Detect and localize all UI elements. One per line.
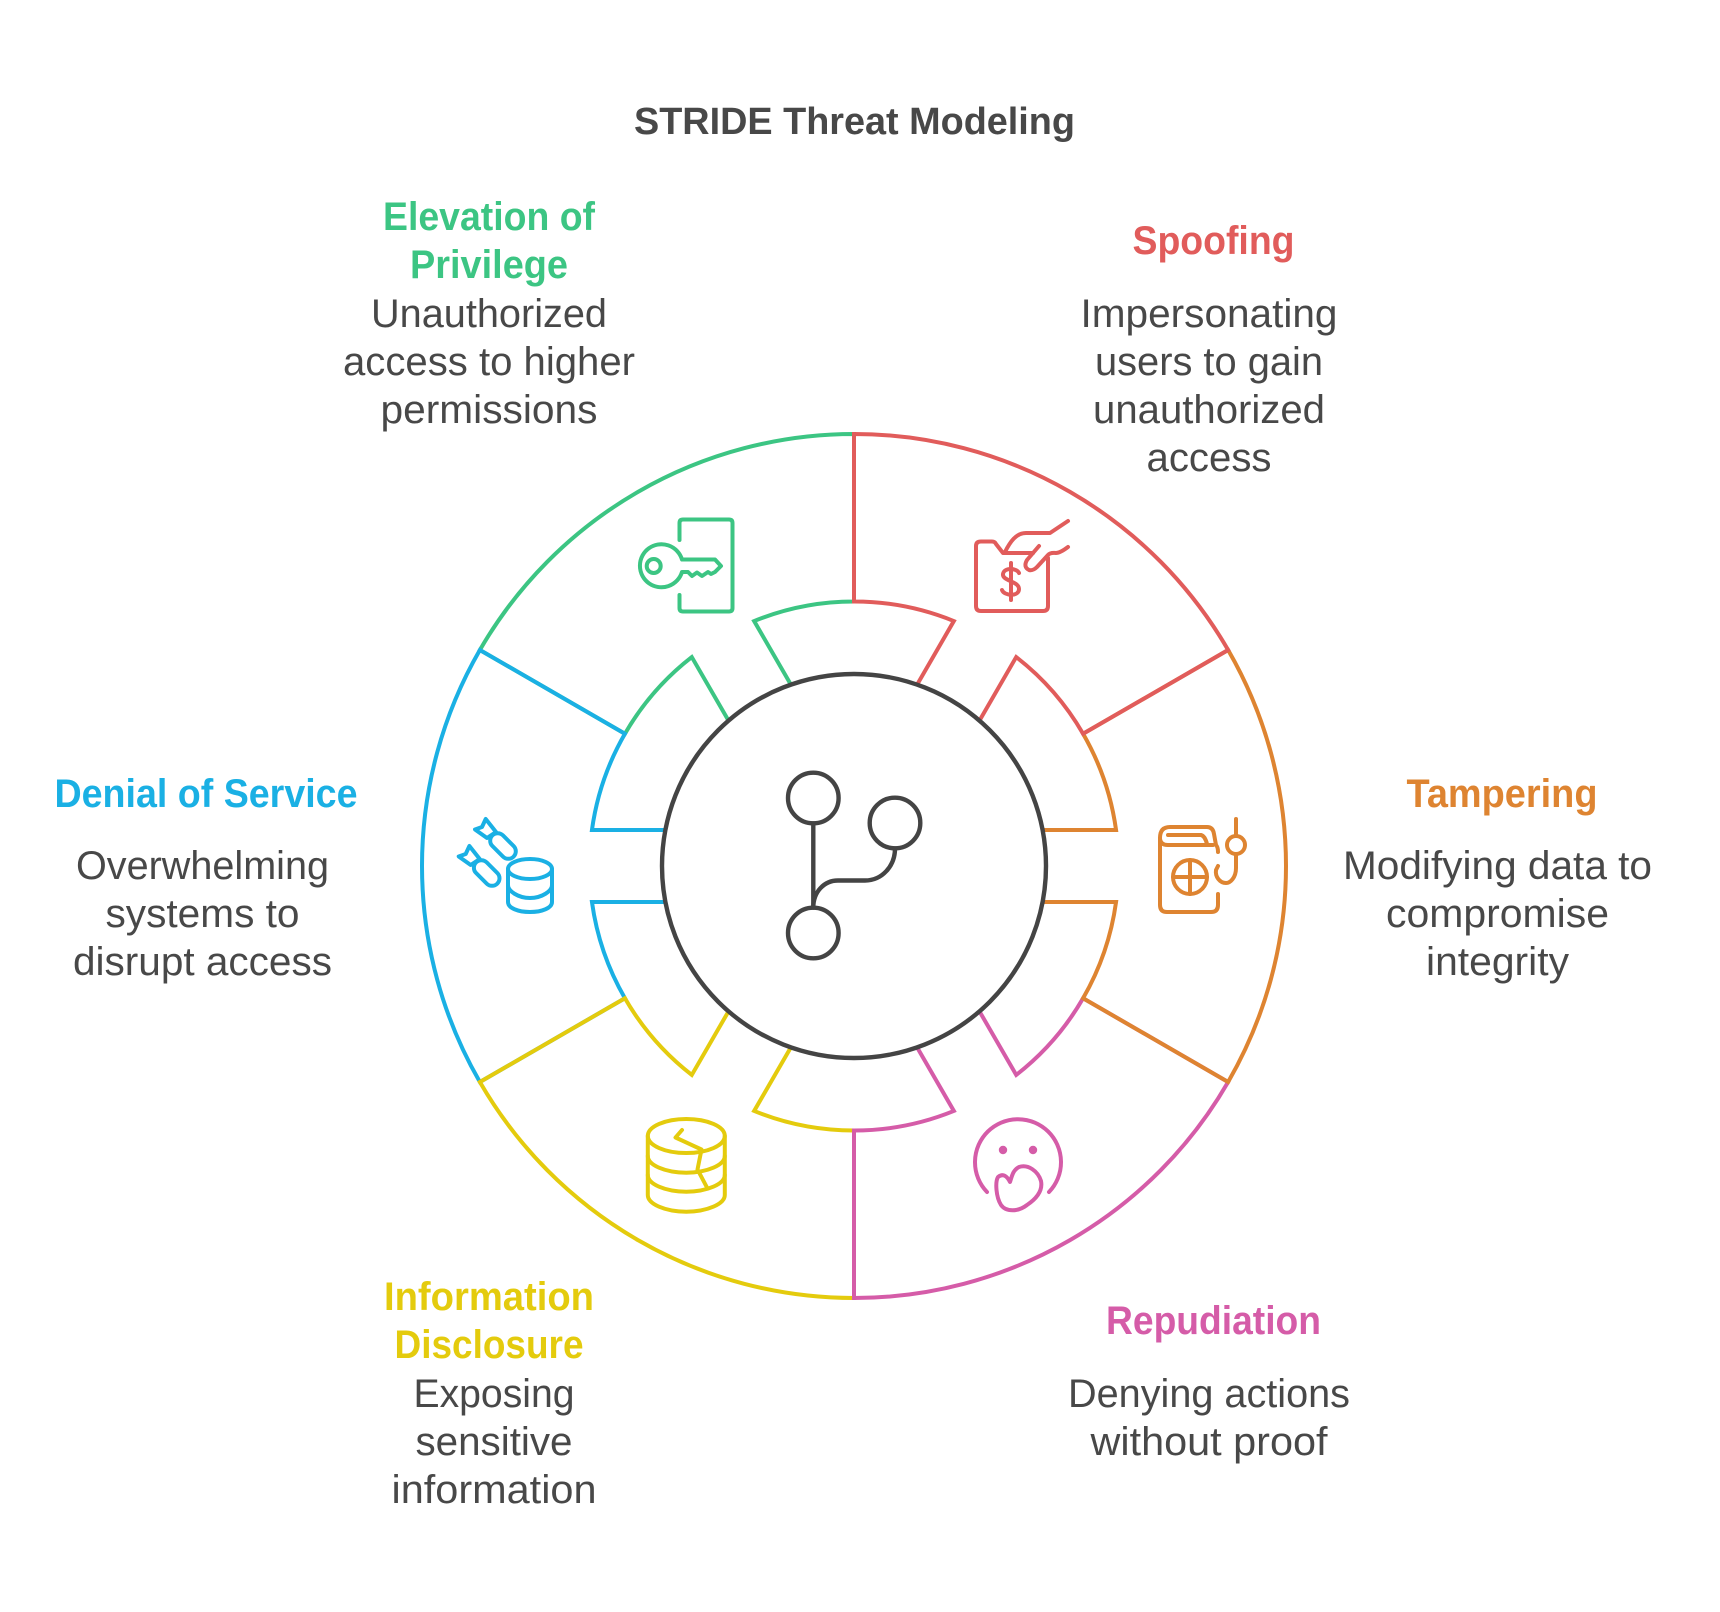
- heading: elevation of privilege: Elevation of: [383, 195, 596, 239]
- heading: elevation of privilege: Privilege: [410, 243, 568, 287]
- description: denial of service: systems to: [106, 892, 300, 936]
- sector outline: elevation of privilege: [480, 326, 927, 800]
- sector outline: information disclosure: [480, 998, 854, 1298]
- description: tampering: integrity: [1426, 940, 1569, 984]
- heading: information disclosure: Information: [384, 1275, 594, 1319]
- heading: information disclosure: Disclosure: [394, 1323, 584, 1367]
- panel: tampering: [969, 650, 1652, 1124]
- description: elevation of privilege: [343, 292, 635, 432]
- description: repudiation: Denying actions: [1068, 1372, 1350, 1416]
- heading: information disclosure: [384, 1275, 594, 1367]
- heading: denial of service: Denial of Service: [54, 772, 358, 816]
- description: information disclosure: information: [392, 1468, 596, 1512]
- description: spoofing: unauthorized: [1093, 388, 1325, 432]
- sector outline: repudiation: [781, 932, 1228, 1406]
- heading: elevation of privilege: [383, 195, 596, 287]
- description: denial of service: Overwhelming: [76, 844, 329, 888]
- icon: cracked database: [648, 1119, 725, 1212]
- panel: spoofing: [854, 219, 1338, 734]
- description: information disclosure: sensitive: [416, 1420, 572, 1464]
- center circle: [662, 674, 1046, 1058]
- panel: denial of service: [54, 608, 739, 1082]
- description: spoofing: [1080, 292, 1338, 480]
- sector outline: tampering: [969, 650, 1415, 1124]
- description: repudiation: [1068, 1372, 1350, 1464]
- description: tampering: compromise: [1386, 892, 1609, 936]
- heading: tampering: Tampering: [1406, 772, 1598, 816]
- icon: branching nodes: [788, 773, 920, 958]
- description: spoofing: access: [1146, 436, 1272, 480]
- panel: repudiation: [781, 932, 1350, 1464]
- sector outline: denial of service: [293, 608, 739, 1082]
- description: tampering: [1343, 844, 1652, 984]
- description: elevation of privilege: permissions: [380, 388, 598, 432]
- heading: repudiation: Repudiation: [1106, 1299, 1321, 1343]
- description: tampering: Modifying data to: [1343, 844, 1652, 888]
- icon: hand taking money from folder: [976, 521, 1068, 611]
- description: denial of service: [73, 844, 332, 984]
- heading: spoofing: Spoofing: [1132, 219, 1294, 263]
- icon: book and hook: [1160, 819, 1245, 912]
- description: elevation of privilege: access to higher: [343, 340, 635, 384]
- icon: shocked face: [975, 1119, 1061, 1210]
- description: repudiation: without proof: [1089, 1420, 1328, 1464]
- description: spoofing: users to gain: [1095, 340, 1323, 384]
- panel: information disclosure: [384, 998, 854, 1512]
- sector outline: spoofing: [854, 434, 1228, 734]
- icon: key and door: [640, 520, 732, 612]
- description: information disclosure: [392, 1372, 596, 1512]
- panel: elevation of privilege: [343, 195, 927, 800]
- icon: bombs and database: [459, 819, 552, 912]
- description: elevation of privilege: Unauthorized: [371, 292, 607, 336]
- title: STRIDE Threat Modeling: [634, 101, 1075, 143]
- description: denial of service: disrupt access: [73, 940, 332, 984]
- description: information disclosure: Exposing: [414, 1372, 574, 1416]
- description: spoofing: Impersonating: [1080, 292, 1338, 336]
